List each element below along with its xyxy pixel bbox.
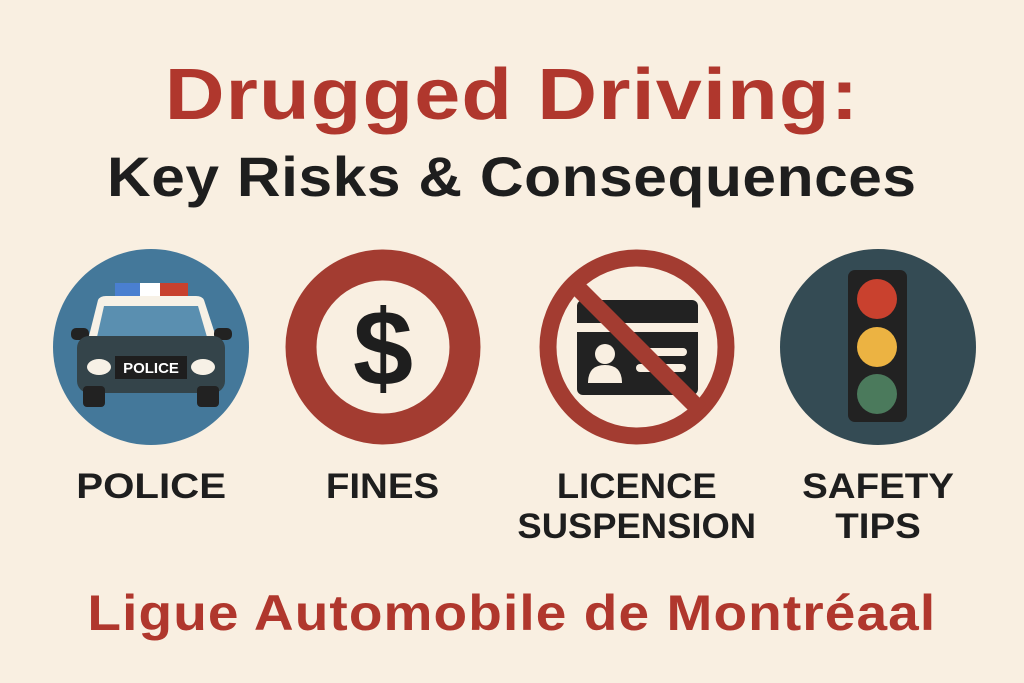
- label: safety tips: SAFETY: [802, 467, 954, 506]
- label: licence suspension: LICENCE: [557, 467, 717, 506]
- subtitle: Key Risks & Consequences: [107, 145, 917, 208]
- title: Drugged Driving:: [165, 55, 859, 135]
- label: police: POLICE: [76, 467, 226, 506]
- label: fines: FINES: [326, 467, 440, 506]
- footer: Ligue Automobile de Montréaal: [88, 585, 936, 641]
- icon: licence suspension: [548, 258, 726, 436]
- icon: fines: [301, 265, 465, 429]
- label: safety tips: [802, 467, 954, 546]
- icon: traffic light: [780, 249, 976, 445]
- label: safety tips: TIPS: [835, 507, 921, 546]
- icon: police car: [53, 249, 249, 445]
- label: licence suspension: [518, 467, 756, 546]
- icon: police car: POLICE: [123, 360, 179, 377]
- icon: fines: $: [353, 287, 413, 408]
- label: licence suspension: SUSPENSION: [518, 507, 756, 546]
